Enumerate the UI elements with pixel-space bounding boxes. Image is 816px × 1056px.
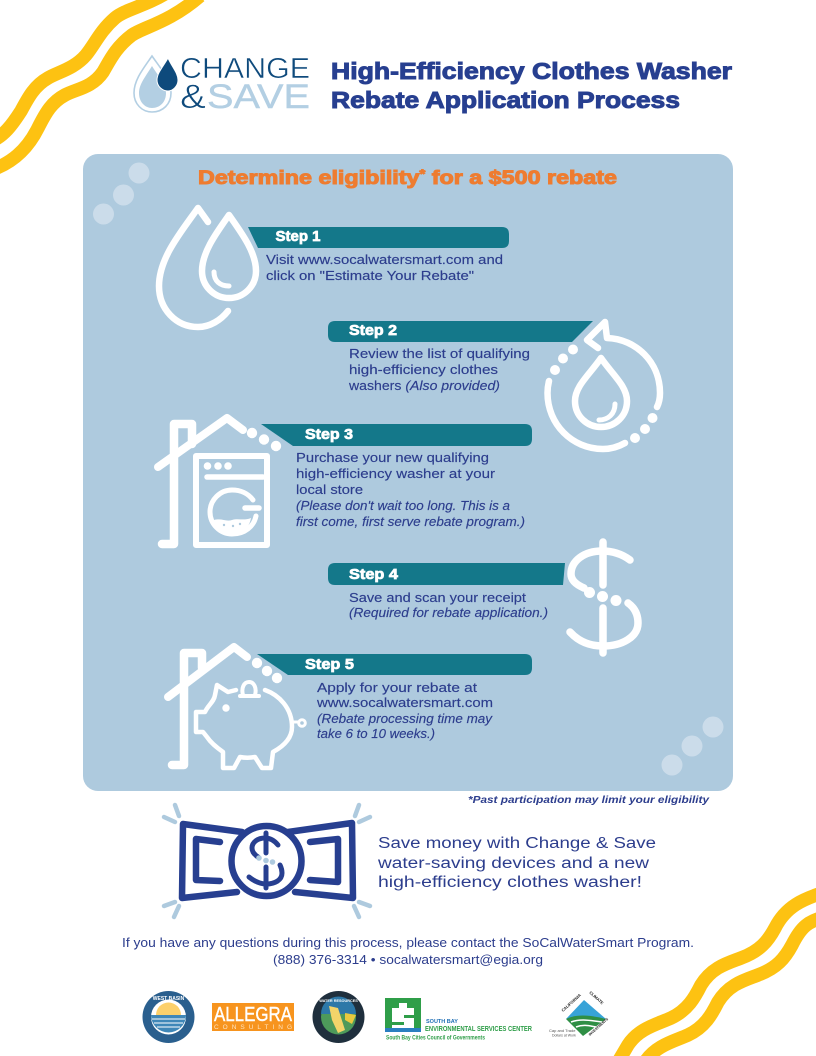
logo: Allegra Consulting: CONSULTING	[214, 1024, 292, 1031]
title: High-Efficiency Clothes Washer	[331, 58, 732, 84]
logo: California Climate Investments: CALIFORNIA	[560, 992, 582, 1013]
title	[331, 58, 732, 113]
step 3 text: high-efficiency washer at your	[296, 466, 496, 481]
step 4 text	[349, 590, 548, 620]
step 3	[261, 424, 532, 529]
step 5 text: www.socalwatersmart.com	[316, 695, 493, 710]
step 3 label: Step 3	[305, 427, 353, 443]
step 2 text: high-efficiency clothes	[349, 362, 498, 377]
logo: Allegra Consulting	[212, 1003, 294, 1031]
decorative wave: bottom right	[618, 893, 816, 1056]
logo: California Climate Investments: Cap and Trade	[549, 1028, 576, 1033]
step 5 text: Apply for your rebate at	[317, 680, 477, 695]
step 4 bar	[328, 563, 565, 585]
step 5 text: (Rebate processing time may	[317, 711, 493, 726]
step 2 label: Step 2	[349, 323, 397, 339]
step 2 text: washers (Also provided)	[348, 378, 500, 393]
logo: South Bay Environmental Services Center: ENVIRONMENTAL SERVICES CENTER	[425, 1024, 532, 1033]
step 4	[328, 563, 565, 620]
savings message: high-efficiency clothes washer!	[378, 874, 642, 891]
panel heading: *	[419, 167, 426, 181]
logo word: SAVE: SAVE	[207, 78, 310, 116]
icon: two water drops	[159, 208, 256, 327]
logo: South Bay Environmental Services Center: SOUTH BAY	[426, 1019, 458, 1025]
step 2	[328, 321, 593, 393]
savings message	[377, 835, 656, 891]
icon: dollar sign	[570, 542, 638, 653]
logo ampersand: &	[180, 78, 206, 116]
logo: Department of Water Resources: WATER RESOURCES	[319, 999, 358, 1003]
icon: light water drop	[134, 56, 171, 112]
panel heading: Determine eligibility	[198, 168, 379, 189]
step 2 bar	[328, 321, 593, 342]
step 4 label: Step 4	[349, 567, 398, 583]
step 5 text	[316, 680, 493, 741]
icon: house with piggy bank	[168, 647, 305, 768]
decorative dots: top left	[93, 162, 150, 224]
logo: California Climate Investments	[549, 990, 610, 1038]
panel: steps	[83, 154, 733, 791]
bill outline	[182, 823, 353, 898]
logo: Department of Water Resources	[312, 991, 364, 1043]
step 4 text: Save and scan your receipt	[349, 590, 526, 605]
step 3 bar	[261, 424, 532, 446]
step 3 text: first come, first serve rebate program.)	[296, 514, 525, 529]
step 5 label: Step 5	[305, 657, 354, 673]
logo: Change & Save	[134, 53, 310, 116]
step 5 text: take 6 to 10 weeks.)	[317, 726, 435, 741]
dollar symbol	[249, 833, 282, 888]
logo: South Bay Environmental Services Center: South Bay Cities Council of Governments	[386, 1034, 485, 1042]
contact information: (888) 376-3314 • socalwatersmart@egia.org	[273, 953, 543, 967]
step 5	[257, 654, 532, 741]
step 3 text: local store	[296, 482, 363, 497]
step 1 label: Step 1	[276, 229, 320, 245]
step 3 text: (Please don't wait too long. This is a	[296, 498, 510, 513]
step 3 text	[296, 450, 525, 529]
shine rays	[164, 805, 370, 917]
logo: West Basin: WEST BASIN	[153, 996, 185, 1002]
logo: Allegra Consulting: ALLEGRA	[214, 1004, 293, 1026]
logo: West Basin	[142, 991, 194, 1043]
savings message: Save money with Change & Save	[378, 835, 656, 852]
icon: house with washer	[158, 418, 281, 545]
step 1 bar	[248, 227, 509, 248]
contact information: If you have any questions during this process, please contact the SoCalWaterSmart Program.	[122, 936, 694, 950]
step 1 text: Visit www.socalwatersmart.com and	[266, 252, 503, 267]
dollar dots	[256, 855, 275, 865]
step 1 text: click on "Estimate Your Rebate"	[266, 268, 474, 283]
step 1	[248, 227, 509, 283]
logo word: CHANGE: CHANGE	[180, 53, 310, 85]
footnote: *Past participation may limit your eligibility	[468, 794, 710, 806]
title: Rebate Application Process	[331, 87, 680, 113]
icon: water drop in circular arrow	[548, 322, 660, 449]
panel heading: for a $500 rebate	[425, 168, 617, 189]
step 5 bar	[257, 654, 532, 675]
icon: dollar bill	[164, 805, 370, 917]
logo: South Bay Environmental Services Center	[385, 998, 532, 1042]
logo: California Climate Investments: INVESTMENTS	[588, 1017, 610, 1037]
icon: dark water drop	[157, 58, 178, 91]
decorative wave: top left	[0, 0, 200, 169]
contact information	[122, 936, 694, 967]
logo: California Climate Investments: Dollars at Work	[552, 1034, 576, 1038]
savings message: water-saving devices and a new	[377, 855, 650, 872]
panel background	[83, 154, 733, 791]
step 4 text: (Required for rebate application.)	[349, 605, 548, 620]
logo: California Climate Investments: CLIMATE	[588, 990, 605, 1006]
decorative dots: bottom right	[662, 716, 724, 776]
step 2 text	[348, 346, 530, 393]
step 2 text: Review the list of qualifying	[349, 346, 530, 361]
step 1 text	[266, 252, 503, 283]
step 3 text: Purchase your new qualifying	[296, 450, 489, 465]
